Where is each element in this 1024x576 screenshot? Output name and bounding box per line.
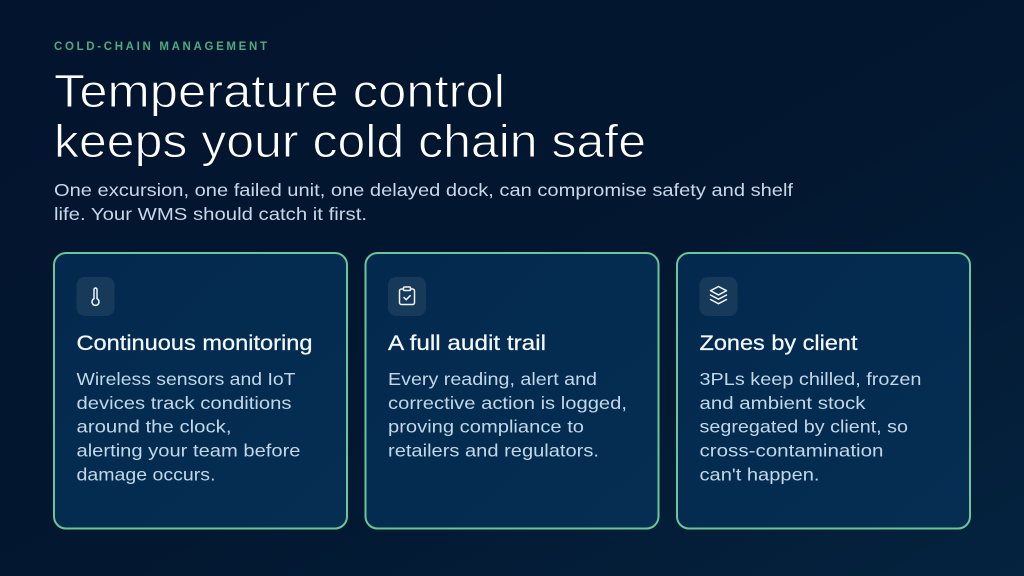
body text: full audit trail [388, 369, 627, 460]
title: Temperature control [54, 65, 505, 117]
body text: zones by client [700, 369, 922, 484]
icon: layers [700, 277, 738, 316]
icon: thermometer [76, 277, 114, 316]
body text: zones by client: segregated by client, so [700, 416, 908, 436]
body text: continuous monitoring: around the clock, [76, 416, 232, 436]
body text: continuous monitoring: damage occurs. [76, 464, 216, 484]
body text: full audit trail: Every reading, alert and [388, 369, 597, 389]
heading: continuous monitoring: Continuous monitoring [76, 332, 312, 355]
body text: continuous monitoring: devices track conditions [76, 393, 292, 413]
eyebrow label: COLD-CHAIN MANAGEMENT [54, 41, 267, 53]
body text: continuous monitoring [76, 369, 300, 484]
panel: continuous monitoring [54, 253, 347, 528]
icon: clipboard check [388, 277, 426, 316]
heading: zones by client: Zones by client [700, 332, 858, 355]
panel: full audit trail [366, 253, 658, 528]
body text: continuous monitoring: alerting your team before [76, 440, 300, 460]
title [54, 65, 646, 167]
subtitle [54, 180, 793, 224]
body text: zones by client: can't happen. [700, 464, 820, 484]
heading: full audit trail: A full audit trail [388, 332, 546, 355]
body text: full audit trail: proving compliance to [388, 416, 584, 436]
body text: zones by client: cross-contamination [700, 440, 884, 460]
body text: full audit trail: corrective action is logged, [388, 393, 627, 413]
body text: continuous monitoring: Wireless sensors and IoT [76, 369, 296, 389]
body text: zones by client: 3PLs keep chilled, frozen [700, 369, 922, 389]
title: keeps your cold chain safe [54, 115, 646, 167]
subtitle: life. Your WMS should catch it first. [54, 204, 367, 224]
subtitle: One excursion, one failed unit, one delayed dock, can compromise safety and shelf [54, 180, 793, 200]
panel: zones by client [677, 253, 970, 528]
body text: zones by client: and ambient stock [700, 393, 866, 413]
body text: full audit trail: retailers and regulators. [388, 440, 599, 460]
